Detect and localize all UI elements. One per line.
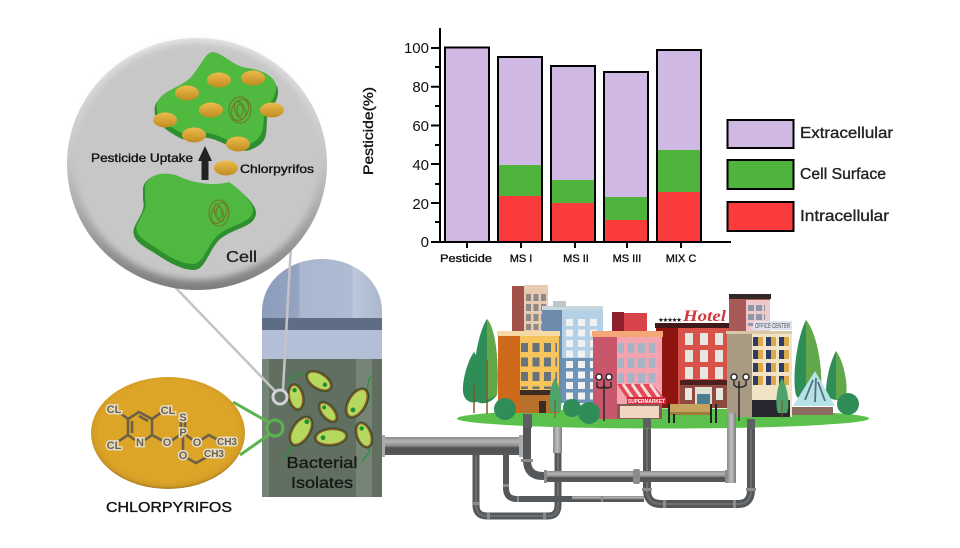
label: bacterial isolates [286,455,358,492]
light pipe sections [545,413,736,502]
molecule atom labels: CH3 [217,437,237,448]
label: chlorpyrifos title: CHLORPYRIFOS [106,499,232,516]
molecule atom labels [107,404,237,462]
pipe flanges [381,435,523,457]
magnifier connector lines [174,245,291,392]
connector: green molecule pointer [233,402,283,455]
x axis labels: MIX C [666,253,696,265]
legend: extracellular [728,120,893,148]
molecule atom labels: CL [107,404,122,416]
nucleus [228,97,252,123]
label: chlorpyrifos: Chlorpyrifos [240,162,314,176]
chlorpyrifos particles on cell [153,70,284,152]
pipe joints [473,459,756,519]
molecule atom labels: O [193,437,202,449]
molecule atom labels: O [163,437,172,449]
tank liquid [262,359,382,497]
arrow: pesticide uptake [198,146,212,180]
small maroon block [612,312,647,332]
panel: chlorpyrifos molecule [91,377,245,489]
supermarket awning [617,384,666,400]
axes and ticks [431,28,731,248]
back trees [463,319,847,414]
y axis labels: 80 [412,79,429,96]
liquid shading [262,359,372,497]
bar: MIX C [657,50,701,242]
y axis labels: 20 [412,196,429,213]
tan tower [512,285,548,333]
bacterial cells [284,365,377,462]
legend: intracellular: Intracellular [800,208,889,225]
bar: MS II [551,66,595,242]
street lamps [596,374,749,421]
x axis labels: MS III [613,253,641,265]
tank dome [262,259,382,318]
molecule atom labels: CL [161,405,176,417]
label: bacterial isolates: Isolates [291,475,353,492]
molecule atom labels: O [179,450,188,462]
y axis labels: 100 [404,40,429,57]
main outflow pipe [384,437,519,455]
bar: Pesticide [445,48,489,242]
label: pesticide uptake: Pesticide Uptake [91,151,193,165]
blue tower [542,301,603,403]
legend: intracellular [728,202,889,231]
ground [457,408,869,428]
label: cell: Cell [226,249,257,266]
hotel building [655,308,729,408]
front shrubs and trees [494,378,859,424]
pink supermarket building [592,331,666,419]
office center building [726,321,792,417]
legend: cell surface: Cell Surface [800,166,886,183]
x axis labels: MS II [563,253,589,265]
y axis labels: 60 [412,118,429,135]
hotel stars: ★★★★★ [658,316,682,324]
office center building: OFFICE CENTER [755,323,790,330]
hotel sign: Hotel [682,308,727,325]
x axis labels: Pesticide [440,253,492,265]
bar: MS III [604,72,648,242]
nucleus [208,200,230,226]
rear tower [729,294,771,332]
panel: cell uptake magnifier [67,38,327,290]
label: bacterial isolates: Bacterial [286,455,358,472]
y axis labels: 0 [421,234,429,251]
y axis title: Pesticide(%) [360,87,376,175]
city scene [457,285,869,433]
pink supermarket building: SUPERMARKET [628,399,666,405]
legend [728,120,893,231]
bar chart: pesticide distribution [360,28,731,265]
x axis labels: MS I [510,253,532,265]
tank collar [262,330,382,360]
molecule atom labels: N [136,437,144,449]
yellow building [497,331,560,413]
chlorpyrifos particle [214,160,238,176]
legend: extracellular: Extracellular [800,125,893,142]
zoom ring: bacterial cell [273,390,287,404]
tank band [262,318,382,330]
molecule atom labels: S [179,412,187,424]
molecule atom labels: CL [107,440,122,452]
fermenter tank [262,259,382,497]
molecule bonds [119,412,218,463]
pipe network [381,412,756,519]
y axis labels: 40 [412,157,429,174]
x axis labels [440,253,696,265]
office sign [753,321,792,330]
molecule atom labels: P [179,427,187,439]
cell before uptake [133,174,256,270]
y axis labels [404,40,429,251]
fountain [792,371,835,415]
cell with absorbed pesticide [153,52,284,152]
pipe inlets on ground [523,413,755,433]
bench [668,404,716,423]
legend: cell surface [728,160,886,189]
branch pipes [476,412,751,516]
bar: MS I [498,57,542,242]
molecule atom labels: CH3 [204,449,224,460]
